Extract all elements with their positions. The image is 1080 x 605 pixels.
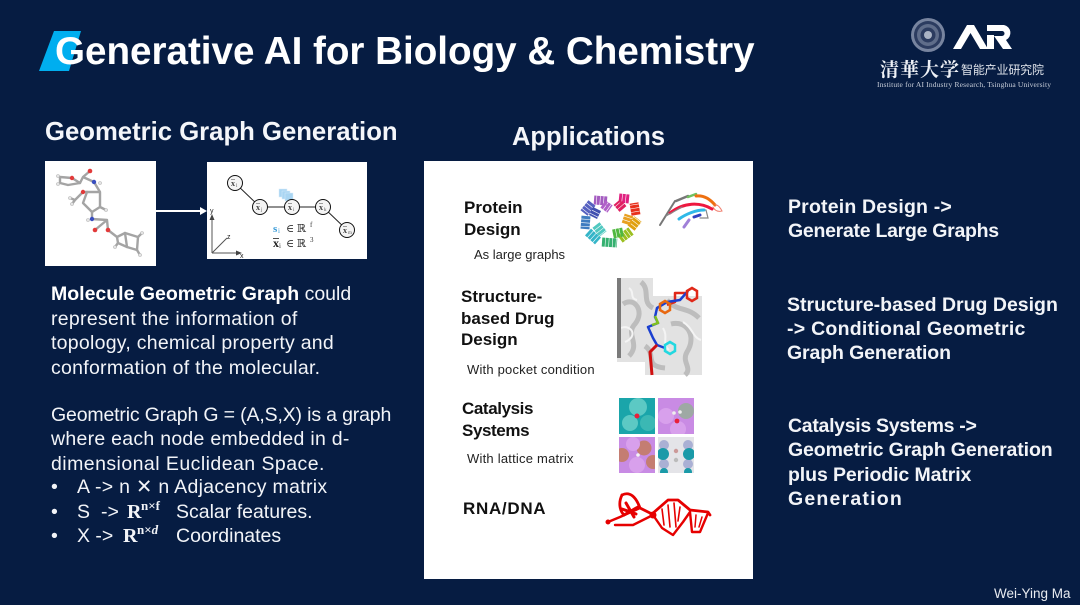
application: catalysis systems	[462, 399, 533, 440]
panel: geometric graph diagram: k	[324, 208, 327, 213]
logo: Tsinghua AIR: 智能产业研究院	[961, 62, 1044, 77]
panel: geometric graph diagram: x	[343, 226, 347, 235]
heading: Geometric Graph Generation: Geometric Graph Generation	[45, 118, 398, 146]
panel: geometric graph diagram: ∈ ℝ	[286, 223, 307, 235]
arrow: molecule to graph	[156, 207, 207, 215]
text block: structure-based drug design mapping: Structure-based Drug Design	[787, 294, 1058, 316]
logo: Tsinghua AIR: 清華大学	[880, 55, 960, 82]
image: RNA structure	[606, 492, 712, 536]
text block: molecule geometric graph description: Molecule Geometric Graph could	[51, 283, 351, 305]
application: structure-based drug design	[461, 287, 555, 349]
text block: structure-based drug design mapping: Graph Generation	[787, 342, 951, 364]
list: graph components: X ->	[77, 525, 113, 547]
application: structure-based drug design: Design	[461, 330, 518, 349]
logo: Tsinghua AIR: Institute for AI Industry Research, Tsinghua University	[877, 80, 1051, 89]
panel: geometric graph diagram: ∈ ℝ	[286, 238, 307, 250]
panel: geometric graph diagram: z	[227, 234, 231, 241]
application: RNA/DNA: RNA/DNA	[463, 499, 546, 518]
text block: structure-based drug design mapping: -> Conditional Geometric	[787, 318, 1026, 340]
application: protein design	[464, 198, 523, 238]
text block: geometric graph definition: Geometric Graph G = (A,S,X) is a graph	[51, 404, 391, 426]
list: graph components: ->	[101, 500, 119, 522]
text block: protein design mapping: Protein Design ->	[788, 196, 952, 218]
feature stack icon	[279, 189, 293, 201]
panel: geometric graph diagram: i	[279, 242, 281, 250]
panel: geometric graph diagram: y	[210, 208, 214, 215]
note: as large graphs: As large graphs	[474, 247, 565, 262]
list: graph components: S	[77, 500, 90, 522]
panel: geometric graph diagram: m	[348, 231, 352, 236]
text block: structure-based drug design mapping	[787, 294, 1058, 364]
text block: molecule geometric graph description: conformation of the molecular.	[51, 356, 320, 378]
application: structure-based drug design: based Drug	[461, 308, 555, 328]
text block: catalysis systems mapping: Catalysis Systems ->	[788, 415, 977, 437]
list: graph components	[51, 476, 327, 547]
axes	[212, 218, 237, 253]
application: catalysis systems: Catalysis	[462, 399, 533, 418]
text block: catalysis systems mapping: Generation	[788, 488, 903, 510]
text block: protein design mapping: Generate Large Graphs	[788, 220, 999, 242]
panel: geometric graph diagram	[207, 162, 367, 260]
text block: molecule geometric graph description	[51, 283, 351, 378]
panel: geometric graph diagram: x	[288, 203, 292, 212]
panel: geometric graph diagram: j	[260, 208, 262, 213]
text block: catalysis systems mapping: Geometric Graph Generation	[788, 439, 1053, 461]
list: graph components: Coordinates	[176, 525, 281, 547]
credit: Wei-Ying Ma: Wei-Ying Ma	[994, 586, 1071, 601]
list: graph components: •	[51, 500, 58, 522]
note: with lattice matrix: With lattice matrix	[467, 451, 574, 466]
text block: geometric graph definition	[51, 404, 391, 474]
application: catalysis systems: Systems	[462, 420, 529, 440]
panel: geometric graph diagram: s	[273, 223, 278, 235]
image: catalyst surfaces	[619, 398, 694, 473]
list: graph components: •	[51, 525, 58, 547]
panel: applications	[424, 161, 753, 579]
list: graph components: R	[123, 525, 137, 547]
panel: geometric graph diagram: l	[236, 184, 238, 189]
text block: molecule geometric graph description: topology, chemical property and	[51, 332, 334, 354]
application: structure-based drug design: Structure-	[461, 287, 542, 306]
application: protein design: Protein	[464, 198, 523, 217]
list: graph components: A -> n ✕ n Adjacency matrix	[77, 476, 327, 498]
panel: geometric graph diagram: f	[310, 221, 313, 229]
list: graph components: n×f	[141, 498, 160, 513]
text block: molecule geometric graph description: represent the information of	[51, 308, 298, 330]
list: graph components: n×d	[137, 522, 158, 537]
panel: geometric graph diagram: 3	[310, 236, 314, 244]
note: with pocket condition: With pocket condition	[467, 362, 595, 377]
text block: geometric graph definition: where each node embedded in d-	[51, 428, 350, 450]
title: Generative AI for Biology & Chemistry	[55, 30, 755, 73]
panel: geometric graph diagram: x	[231, 179, 235, 188]
panel: geometric graph diagram: x	[240, 253, 244, 260]
panel: geometric graph diagram: x	[256, 203, 260, 212]
application: protein design: Design	[464, 220, 521, 238]
text block: protein design mapping	[788, 196, 999, 242]
panel: geometric graph diagram: x	[273, 236, 279, 250]
icon: protein ring	[580, 194, 642, 248]
panel: geometric graph diagram: i	[293, 208, 295, 213]
title accent parallelogram	[39, 31, 81, 71]
heading: Applications: Applications	[512, 123, 665, 151]
logo: Tsinghua AIR	[877, 18, 1051, 89]
list: graph components: R	[127, 500, 141, 522]
panel: molecule image	[45, 161, 156, 266]
panel: geometric graph diagram: i	[278, 227, 280, 235]
text block: catalysis systems mapping	[788, 415, 1053, 510]
panel: geometric graph diagram: x	[319, 203, 323, 212]
text block: catalysis systems mapping: plus Periodic Matrix	[788, 464, 971, 486]
image: drug in protein pocket	[617, 278, 702, 377]
icon: protein ribbon	[659, 192, 723, 229]
text block: geometric graph definition: dimensional Euclidean Space.	[51, 452, 325, 474]
list: graph components: Scalar features.	[176, 500, 313, 522]
list: graph components: •	[51, 476, 58, 498]
